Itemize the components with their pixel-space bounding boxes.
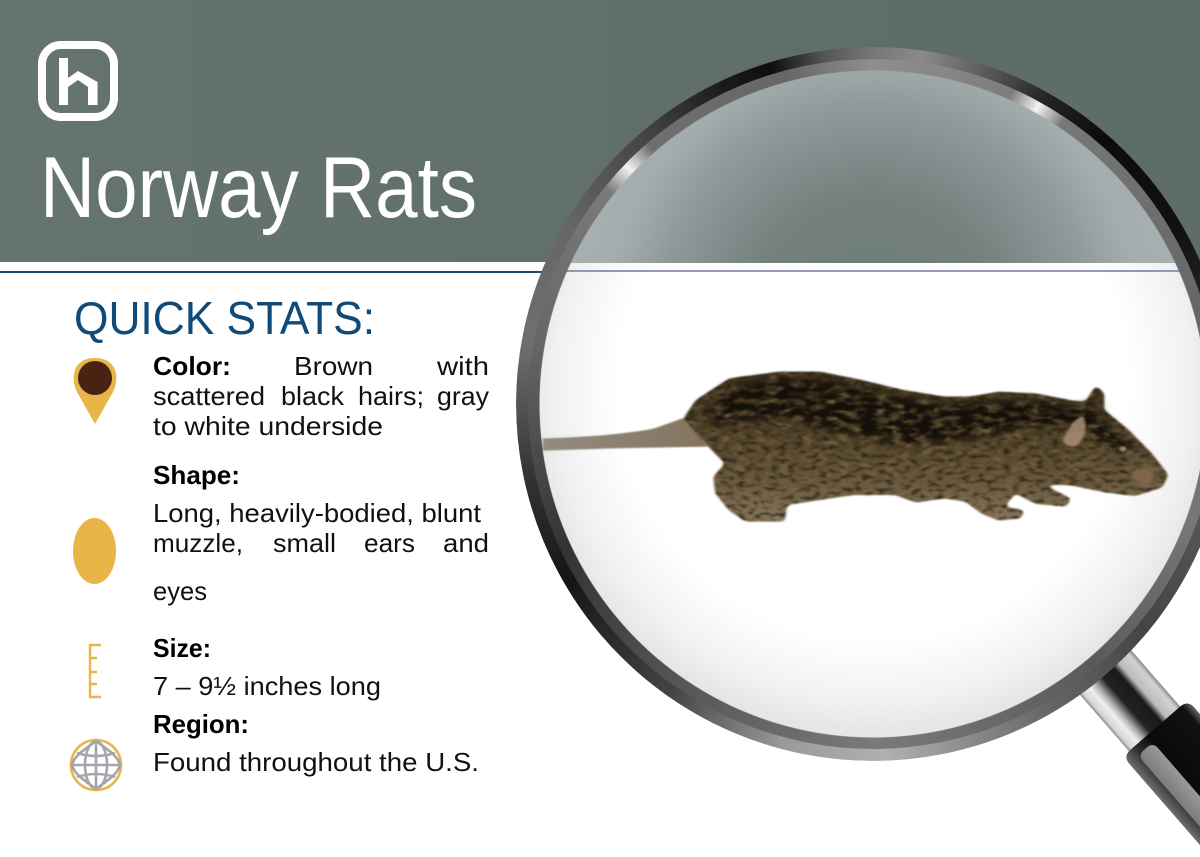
rat eye [1120,446,1126,452]
text block: size: Size: [153,633,211,663]
rat snout [1133,467,1154,485]
text block: color: hairs; [358,381,424,411]
text block: region [153,709,479,777]
icon: shape oval [73,518,116,584]
text block: color [153,351,489,441]
outer ring band [516,47,1200,761]
rat tail [542,417,708,451]
text block: color: Brown [294,351,373,381]
text block: shape: and [443,528,489,558]
text block: color: black [281,381,345,411]
rat fur: dark back [704,378,1135,452]
text block: shape: Shape: [153,460,240,490]
inner ring band [528,59,1200,749]
heading: quick stats: QUICK STATS: [74,292,375,344]
text block: shape [153,460,489,606]
text block: shape: ears [364,528,415,558]
text block: size [153,633,381,701]
text block: region: Region: [153,709,249,739]
magnifier lens [538,66,1200,741]
icon: ruler [90,645,101,697]
text block: color: gray [437,381,489,411]
magnifier handle [1072,641,1200,845]
icon: globe [71,740,121,790]
icon: color pin [74,358,116,424]
text block: color: with [436,351,489,381]
rat ear [1063,417,1085,446]
text block: color: Color: [153,351,231,381]
rat illustration [542,372,1168,522]
text block: color: scattered [153,381,265,411]
text block: shape: Long, heavily-bodied, blunt [153,498,482,528]
text block: shape: muzzle, [153,528,243,558]
logo: house h [42,45,114,117]
text block: shape: eyes [153,576,207,606]
text block: size: 7 – 9½ inches long [153,671,381,701]
header band [0,0,1200,262]
title: Norway Rats [40,140,477,236]
text block: region: Found throughout the U.S. [153,747,479,777]
header rule [0,271,545,273]
text block: color: to white underside [153,411,383,441]
rat body [683,372,1168,522]
text block: shape: small [273,528,336,558]
magnifier ring [516,47,1200,761]
